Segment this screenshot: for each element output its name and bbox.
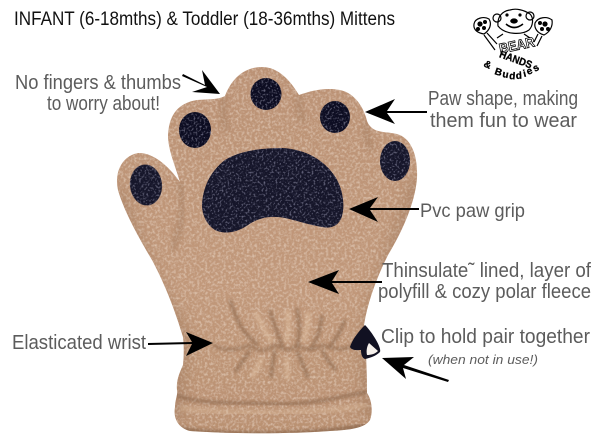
callout: no fingers and thumbs (15, 70, 220, 115)
callout text: Clip to hold pair together (381, 326, 590, 348)
toe pad 2 (250, 78, 282, 110)
logo wordmark: and Buddies: & (482, 59, 493, 72)
clip (350, 325, 380, 359)
logo wordmark: and Buddies: u (501, 69, 509, 81)
mitten shading and folds (118, 95, 417, 434)
toe pad 4 (380, 141, 410, 181)
arrow (349, 197, 419, 222)
logo left paw (474, 18, 497, 50)
logo wordmark: and Buddies: e (525, 65, 535, 78)
logo body lines (497, 34, 530, 38)
toe pad 1 (179, 112, 211, 148)
arrow (308, 270, 382, 294)
callout: thinsulate lining (308, 260, 591, 303)
wrist gathers (213, 300, 355, 378)
callout text: Elasticated wrist (12, 332, 146, 354)
callout text line 2: them fun to wear (430, 109, 577, 132)
title: INFANT (6-18mths) & Toddler (18-36mths) Mittens (14, 9, 395, 30)
logo wordmark: HANDS: HANDS (498, 48, 534, 71)
callout text: Pvc paw grip (420, 200, 525, 222)
arrow (182, 70, 220, 94)
toe pad 3 (320, 101, 350, 133)
callout text line 2: to worry about! (47, 92, 160, 115)
logo bear face (493, 12, 534, 28)
arrow (382, 357, 449, 382)
arrow (148, 332, 213, 356)
callout text line 1: No fingers & thumbs (15, 71, 181, 94)
thumb pad (128, 163, 164, 207)
logo right paw (534, 18, 552, 46)
logo wordmark: and Buddies: B (493, 66, 503, 79)
callout text line 1: Thinsulate˜ lined, layer of (382, 260, 591, 282)
logo wordmark: and Buddies: d (509, 71, 516, 82)
mitten body (117, 67, 417, 433)
logo wordmark: and Buddies (482, 59, 542, 82)
callout: pvc paw grip (349, 197, 525, 222)
arrow (365, 99, 427, 124)
icon: Bear Hands and Buddies logo (474, 9, 552, 82)
logo wordmark: and Buddies: s (531, 62, 542, 75)
logo wordmark: and Buddies: d (515, 71, 522, 82)
callout: clip (381, 326, 590, 382)
callout note: (when not in use!) (428, 352, 538, 367)
callout: elasticated wrist (12, 332, 213, 356)
main PVC paw pad (202, 148, 343, 232)
mitten (117, 67, 417, 434)
logo bear head (498, 9, 533, 33)
logo wordmark: BEAR: BEAR (498, 33, 536, 57)
callout: paw shape (365, 87, 578, 132)
logo wordmark: and Buddies: i (522, 69, 528, 80)
cuff fold (176, 392, 367, 404)
